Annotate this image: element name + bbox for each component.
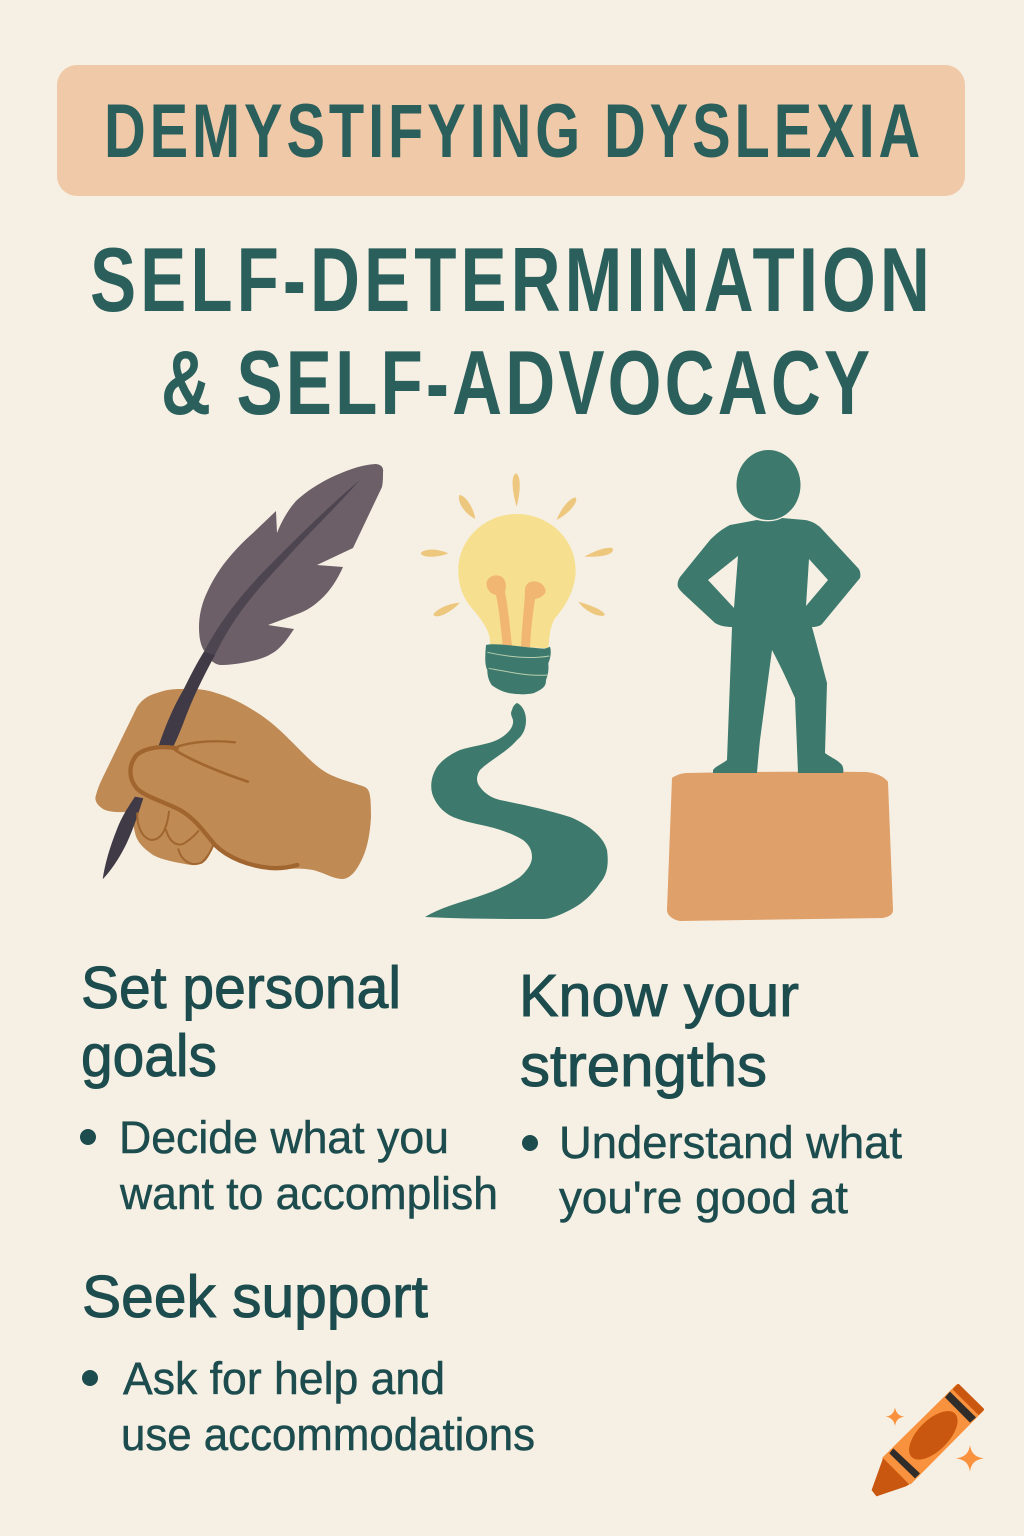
section: know your strengths: Understand what — [559, 1117, 903, 1168]
bulb screw base — [485, 644, 551, 694]
pedestal — [667, 772, 893, 921]
crayon body — [884, 1386, 982, 1483]
sparkle small — [886, 1407, 904, 1426]
title banner — [57, 65, 965, 196]
person head — [736, 450, 800, 520]
section: know your strengths: strengths — [520, 1033, 767, 1099]
section: know your strengths: you're good at — [559, 1172, 848, 1223]
section: know your strengths — [519, 963, 903, 1223]
icon: hand holding feather quill — [95, 464, 383, 879]
bulb glass — [458, 514, 576, 648]
section: set personal goals — [80, 955, 498, 1219]
section: seek support: Seek support — [82, 1264, 428, 1330]
icon: person standing on pedestal — [667, 450, 893, 921]
bulb filaments — [487, 575, 512, 647]
heading: self-determination and self-advocacy: SELF-DETERMINATION — [90, 230, 930, 331]
icon: crayon with sparkles — [872, 1385, 984, 1496]
crayon tip — [872, 1459, 908, 1496]
section: set personal goals: goals — [81, 1023, 217, 1089]
icon: light bulb — [421, 473, 613, 694]
section: set personal goals: want to accomplish — [119, 1168, 498, 1219]
section: set personal goals: Set personal — [81, 955, 401, 1021]
bullet — [80, 1129, 96, 1145]
heading: self-determination and self-advocacy — [90, 230, 930, 434]
section: seek support: Ask for help and — [123, 1353, 445, 1404]
feather vane — [199, 464, 383, 665]
quill shaft and hand creases — [103, 480, 360, 879]
bullet — [82, 1370, 98, 1386]
section: seek support: use accommodations — [121, 1409, 535, 1460]
bulb rays — [421, 473, 613, 616]
heading: self-determination and self-advocacy: & SELF-ADVOCACY — [161, 333, 870, 434]
icon: winding path — [425, 703, 608, 919]
section: set personal goals: Decide what you — [119, 1112, 449, 1163]
bullet — [522, 1135, 538, 1151]
person body — [678, 518, 860, 773]
section: know your strengths: Know your — [519, 963, 799, 1029]
section: seek support — [82, 1264, 535, 1460]
title banner: DEMYSTIFYING DYSLEXIA — [104, 89, 920, 174]
sparkle large — [956, 1445, 984, 1472]
